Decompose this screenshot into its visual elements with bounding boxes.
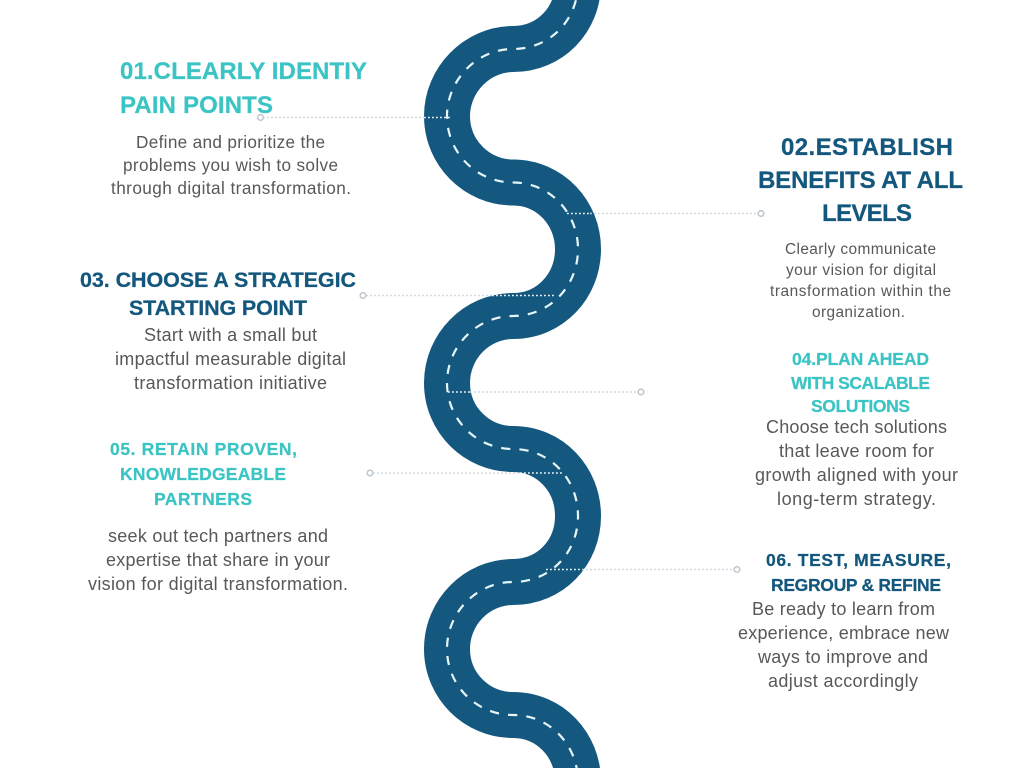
body 03: transformation initiative [134,373,327,393]
heading 04: 04.PLAN AHEAD [792,349,929,369]
body 02: transformation within the [770,283,951,300]
heading 01 [120,58,367,119]
heading 05: 05. RETAIN PROVEN, [110,439,297,459]
body 06: Be ready to learn from [752,599,935,619]
step 06 block [738,550,951,691]
connector 6 [546,567,740,572]
body 03 [115,325,346,393]
body 04: Choose tech solutions [766,417,947,437]
body 03: Start with a small but [144,325,317,345]
body 06: adjust accordingly [768,671,918,691]
body 03: impactful measurable digital [115,349,346,369]
body 01: Define and prioritize the [136,132,325,152]
heading 05 [110,439,297,509]
heading 02: 02.ESTABLISH [781,134,953,161]
winding road [447,0,578,768]
step 03 block [80,268,356,393]
body 05: seek out tech partners and [108,526,328,546]
body 02: organization. [812,304,905,321]
body 05 [88,526,348,594]
heading 04 [791,349,930,416]
body 05: expertise that share in your [106,550,330,570]
step 05 block [88,439,348,594]
body 04: that leave room for [779,441,934,461]
step 02 block [758,134,963,321]
heading 02 [758,134,963,227]
heading 02: LEVELS [822,200,912,227]
heading 03: STARTING POINT [129,296,307,320]
heading 03 [80,268,356,320]
heading 04: SOLUTIONS [811,396,910,416]
body 05: vision for digital transformation. [88,574,348,594]
step 04 block [755,349,958,509]
connector 2 [567,211,764,216]
body 06 [738,599,950,691]
body 01: problems you wish to solve [123,155,338,175]
heading 04: WITH SCALABLE [791,373,930,393]
heading 06: REGROUP & REFINE [771,575,941,595]
heading 01: 01.CLEARLY IDENTIY [120,58,367,85]
connector 5 [367,470,562,476]
heading 05: KNOWLEDGEABLE [120,464,286,484]
heading 06: 06. TEST, MEASURE, [766,550,951,570]
body 02: Clearly communicate [785,241,936,258]
heading 05: PARTNERS [154,489,252,509]
connector 3 [360,293,555,298]
connector 1 [258,115,452,120]
body 01 [111,132,351,198]
body 02 [770,241,951,321]
step 01 block [111,58,367,198]
heading 06 [766,550,951,595]
body 06: ways to improve and [757,647,928,667]
body 02: your vision for digital [786,262,936,279]
body 04: long-term strategy. [777,489,936,509]
body 04: growth aligned with your [755,465,958,485]
heading 03: 03. CHOOSE A STRATEGIC [80,268,356,292]
body 01: through digital transformation. [111,178,351,198]
heading 02: BENEFITS AT ALL [758,167,963,194]
connector 4 [448,389,644,395]
heading 01: PAIN POINTS [120,92,273,119]
body 06: experience, embrace new [738,623,950,643]
body 04 [755,417,958,509]
